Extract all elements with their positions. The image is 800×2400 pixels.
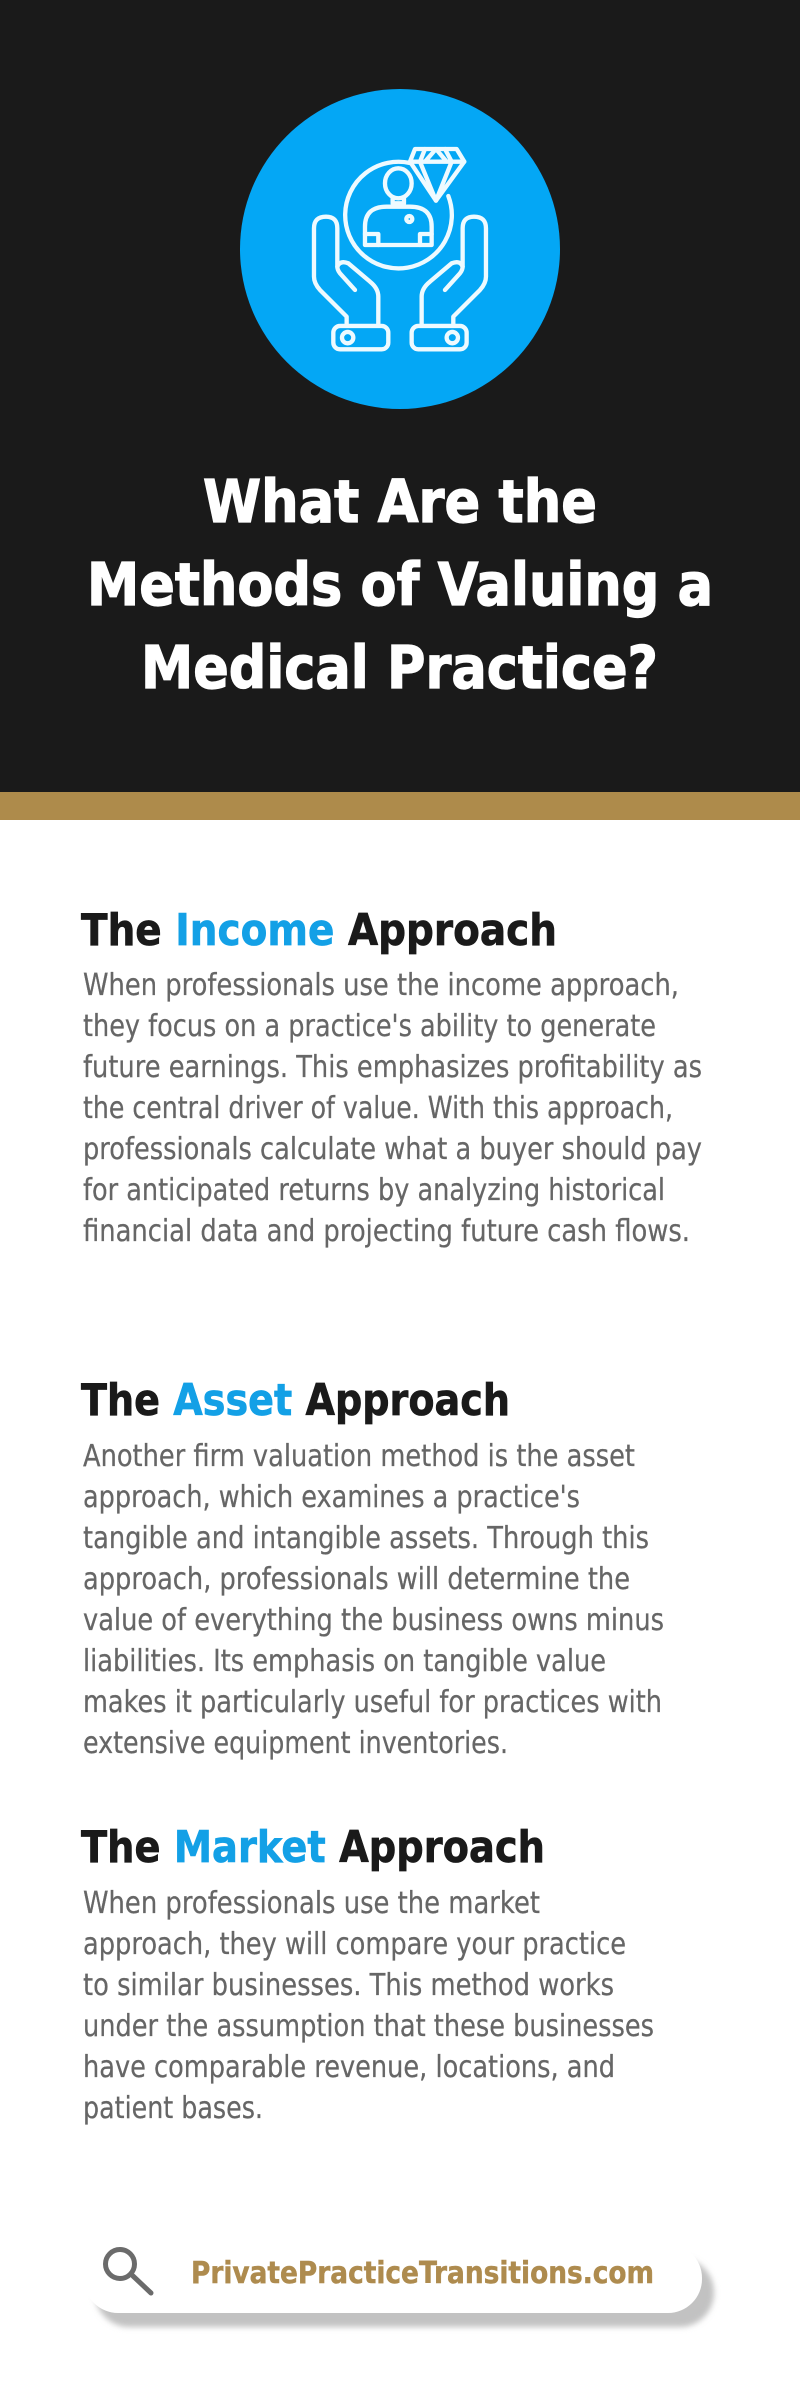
heading: income: The Income Approach	[81, 905, 557, 956]
text block: market: under the assumption that these businesses	[83, 2009, 654, 2044]
panel: dark header	[0, 0, 800, 792]
text block: income	[83, 968, 702, 1249]
text block: income: the central driver of value. With this approach,	[83, 1091, 673, 1126]
title: Medical Practice?	[141, 633, 658, 702]
website url: PrivatePracticeTransitions.com	[191, 2256, 654, 2291]
text block: asset: tangible and intangible assets. Through this	[83, 1521, 649, 1556]
text block: income: for anticipated returns by analyzing historical	[83, 1173, 665, 1208]
text block: income: they focus on a practice's ability to generate	[83, 1009, 656, 1044]
text block: income: When professionals use the income approach,	[83, 968, 679, 1003]
heading: asset: The Asset Approach	[81, 1375, 510, 1426]
text block: income: future earnings. This emphasizes profitability as	[83, 1050, 702, 1085]
icon: hands holding person and diamond	[240, 89, 560, 409]
text block: market: approach, they will compare your practice	[83, 1927, 626, 1962]
title: What Are the	[203, 467, 597, 536]
text block: market: patient bases.	[83, 2091, 263, 2126]
text block: asset	[83, 1439, 664, 1761]
section: income approach	[81, 905, 702, 1249]
text block: asset: Another firm valuation method is the asset	[83, 1439, 635, 1474]
text block: asset: approach, professionals will determine the	[83, 1562, 630, 1597]
title	[87, 467, 713, 702]
text block: market	[83, 1886, 654, 2126]
text block: asset: makes it particularly useful for practices with	[83, 1685, 662, 1720]
gold divider band	[0, 792, 800, 820]
search bar footer	[84, 2244, 714, 2327]
text block: asset: extensive equipment inventories.	[83, 1726, 508, 1761]
heading: market: The Market Approach	[81, 1822, 545, 1873]
text block: market: to similar businesses. This method works	[83, 1968, 614, 2003]
text block: income: professionals calculate what a buyer should pay	[83, 1132, 702, 1167]
icon: magnifying glass	[106, 2250, 151, 2293]
text block: income: financial data and projecting future cash flows.	[83, 1214, 690, 1249]
text block: asset: liabilities. Its emphasis on tangible value	[83, 1644, 606, 1679]
text block: asset: value of everything the business owns minus	[83, 1603, 664, 1638]
title: Methods of Valuing a	[87, 550, 713, 619]
text block: market: When professionals use the market	[83, 1886, 540, 1921]
section: market approach	[81, 1822, 654, 2126]
section: asset approach	[81, 1375, 664, 1761]
text block: asset: approach, which examines a practice's	[83, 1480, 580, 1515]
text block: market: have comparable revenue, locations, and	[83, 2050, 615, 2085]
